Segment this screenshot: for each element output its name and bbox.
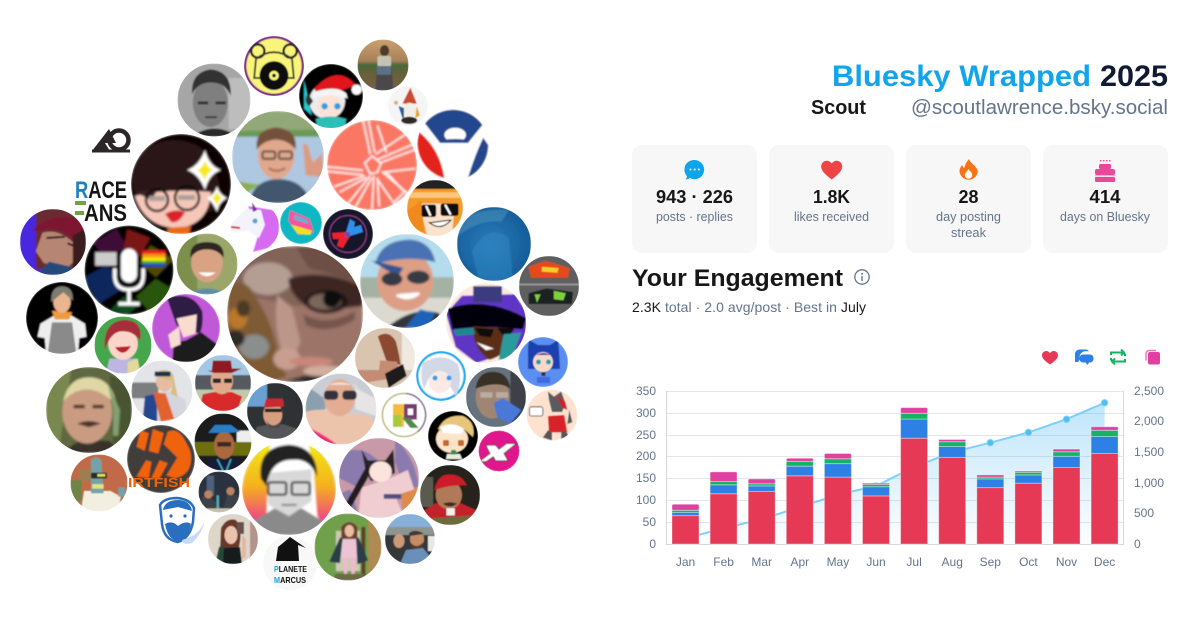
left axis labels: 200	[636, 449, 656, 463]
icon: info	[855, 270, 869, 284]
bar: Feb	[710, 472, 737, 544]
avatar: woman from behind	[355, 328, 415, 388]
avatar: man in blue cap	[194, 414, 252, 470]
avatar: RaceFans logo: RACE	[75, 177, 127, 204]
avatar: race cars	[519, 256, 579, 316]
avatar: red-hair anime laughing	[94, 316, 152, 374]
avatar: man with red cap, truck	[247, 383, 303, 439]
bar: Sep	[977, 475, 1004, 544]
bar: Nov	[1053, 449, 1080, 544]
stat card: likes: likes received	[794, 210, 869, 224]
bar: Jul	[901, 408, 928, 544]
month labels: Jan	[676, 555, 695, 569]
avatar: man in cap and sunglasses	[360, 234, 454, 328]
avatar: AO logo	[92, 129, 130, 151]
avatar: man in red	[195, 355, 251, 411]
legend: replies bubbles	[1075, 350, 1094, 365]
legend: likes heart	[1042, 351, 1058, 364]
stat card: days on Bluesky: 414	[1090, 187, 1120, 207]
avatar: unicorn	[229, 202, 279, 252]
avatar: field at sunset	[358, 40, 408, 90]
avatar: woman mirror selfie	[208, 514, 258, 564]
month labels: May	[827, 555, 849, 569]
right axis labels: 1,500	[1134, 445, 1164, 459]
month labels: Mar	[751, 555, 772, 569]
left axis labels: 250	[636, 428, 656, 442]
avatar: yellow bear record	[244, 36, 304, 96]
avatar: Planete Marcus logo	[263, 536, 317, 590]
icon: heart	[821, 161, 842, 180]
bar: Oct	[1015, 471, 1042, 544]
avatar: chibi blond	[428, 411, 478, 461]
month labels	[676, 555, 1115, 569]
engagement summary: 2.3K total · 2.0 avg/post · Best in July	[632, 299, 866, 315]
avatar: RaceFans logo: ANS	[84, 200, 127, 227]
avatar: red hair portrait	[20, 209, 86, 275]
title: 2025	[1100, 60, 1168, 93]
stat card: days on Bluesky: days on Bluesky	[1060, 210, 1151, 224]
left axis labels: 50	[643, 515, 656, 529]
stat card: streak	[906, 145, 1031, 253]
avatar: coral geometric	[327, 120, 417, 210]
avatar: podcast microphone	[84, 226, 174, 314]
avatar: small crew photo	[198, 472, 240, 512]
avatar: grayscale man	[178, 64, 250, 136]
stat card: likes: 1.8K	[813, 187, 850, 207]
icon: flame	[960, 159, 978, 180]
bar: Jan	[672, 504, 699, 544]
avatar: pink X	[478, 430, 520, 472]
cumulative line	[686, 400, 1108, 538]
avatar: RaceFans logo	[75, 177, 127, 227]
chart legend	[1042, 350, 1160, 365]
right axis labels: 1,000	[1134, 476, 1164, 490]
avatar: Bender in white coat	[70, 454, 128, 512]
bar: Mar	[748, 479, 775, 544]
bar: May	[824, 454, 851, 544]
avatar: wolf character	[526, 390, 578, 440]
bar: Apr	[786, 458, 813, 544]
avatar cluster	[20, 36, 579, 590]
avatar: overalls character	[26, 282, 98, 354]
avatar: Ferrari cap man	[420, 465, 480, 525]
icon: speech bubble	[684, 160, 704, 180]
grid lines	[666, 391, 1124, 544]
avatar: man with glasses waving	[232, 111, 324, 203]
avatar: deep blue	[457, 207, 531, 281]
month labels: Feb	[713, 555, 734, 569]
stat card: streak: 28	[958, 187, 978, 207]
avatar: woman with scarf	[132, 360, 192, 422]
stat card: posts and replies: 943 · 226	[656, 187, 733, 207]
month labels: Jul	[906, 555, 922, 569]
handle: @scoutlawrence.bsky.social	[911, 97, 1168, 119]
avatar: dark logo with star	[323, 209, 373, 259]
avatar: sparkle anime	[131, 134, 231, 234]
bar: Aug	[939, 440, 966, 544]
avatar: man with headband	[46, 367, 132, 453]
avatar: purple background anime	[152, 294, 220, 362]
month labels: Jun	[866, 555, 886, 569]
avatar: santa anime	[299, 64, 363, 129]
left axis labels: 100	[636, 493, 656, 507]
avatar: R logo	[381, 392, 427, 438]
avatar: Planete Marcus logo: MARCUS	[274, 575, 306, 585]
avatar: smiling man	[176, 234, 238, 294]
month labels: Nov	[1056, 555, 1077, 569]
avatar: man with headset	[466, 367, 526, 427]
month labels: Aug	[942, 555, 963, 569]
left axis labels: 350	[636, 384, 656, 398]
left axis labels	[636, 384, 656, 551]
avatar: gnome	[388, 86, 428, 126]
avatar: teal car	[280, 202, 322, 244]
avatar: DirtFish logo: IRTFISH	[128, 475, 190, 490]
avatar: blue cat girl	[518, 337, 568, 387]
right axis labels: 2,000	[1134, 414, 1164, 428]
cumulative area	[686, 403, 1105, 544]
avatar: pink wolf-ear anime	[339, 438, 419, 518]
avatar: bearded blue cartoon	[160, 498, 204, 544]
avatar: central close-up face	[226, 246, 363, 382]
right axis labels: 2,500	[1134, 384, 1164, 398]
bar: Dec	[1091, 427, 1118, 544]
avatar: Planete Marcus logo: PLANETE	[274, 564, 307, 574]
month labels: Oct	[1019, 555, 1038, 569]
avatar: two men at track	[385, 514, 435, 564]
avatar: anime with cap and shades	[446, 283, 526, 363]
stat card: posts and replies: posts · replies	[656, 210, 733, 224]
legend: reposts arrows	[1111, 350, 1125, 364]
month labels: Sep	[980, 555, 1001, 569]
stat card: days on Bluesky	[1043, 145, 1168, 253]
display name: Scout	[811, 97, 866, 119]
stat card: posts and replies	[632, 145, 757, 253]
avatar: orange hair sunglasses	[407, 180, 463, 236]
avatar: man in pink bathing top	[306, 374, 376, 444]
left axis labels: 150	[636, 471, 656, 485]
avatar: blue ring anime	[416, 351, 466, 401]
avatar: blue and red runner logo	[417, 109, 489, 181]
right axis labels	[1134, 384, 1164, 551]
left axis labels: 0	[649, 537, 656, 551]
month labels: Dec	[1094, 555, 1115, 569]
right axis labels: 0	[1134, 537, 1141, 551]
avatar: DirtFish logo	[127, 425, 195, 493]
month labels: Apr	[790, 555, 809, 569]
avatar: black and white portrait on gradient	[242, 441, 336, 535]
icon: birthday cake	[1095, 160, 1115, 182]
bar: Jun	[862, 483, 890, 544]
stacked bars	[672, 408, 1118, 544]
heading: Your Engagement: Your Engagement	[632, 265, 843, 292]
stat card: streak: streak	[951, 226, 987, 240]
avatar: woman in garden	[314, 514, 382, 580]
left axis labels: 300	[636, 406, 656, 420]
title: Bluesky Wrapped	[832, 60, 1091, 93]
right axis labels: 500	[1134, 506, 1154, 520]
engagement chart	[636, 384, 1164, 569]
stat card: streak: day posting	[936, 210, 1001, 224]
stat card: likes	[769, 145, 894, 253]
legend: quotes squares	[1146, 350, 1160, 364]
